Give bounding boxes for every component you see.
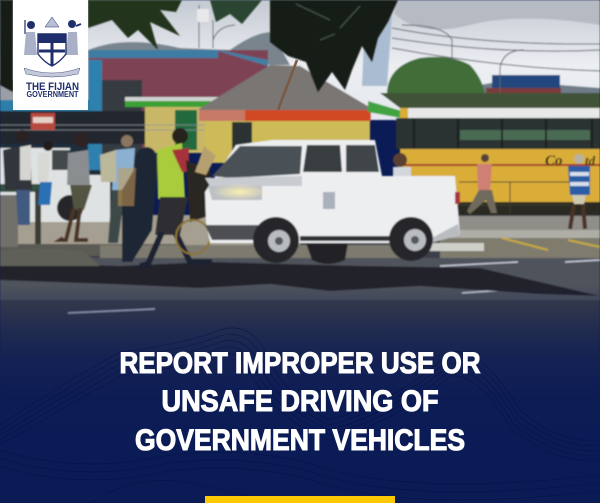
logo panel: The Fijian Government: GOVERNMENT [26, 90, 79, 99]
person behind truck [393, 153, 407, 167]
worker in hi-vis vest [140, 128, 216, 266]
left building [0, 100, 125, 215]
hut with grey roof [205, 118, 370, 163]
background white truck [0, 148, 110, 222]
street lights and wires [199, 5, 600, 95]
dark storefront [0, 111, 145, 144]
fence [459, 182, 570, 213]
pedestrian pink shirt [467, 154, 497, 214]
photo: street scene with government vehicle: td [585, 153, 596, 168]
tree shadow on road [0, 262, 600, 296]
green awning shop [145, 105, 215, 153]
logo panel: The Fijian Government [13, 0, 88, 110]
yellow bus [400, 108, 600, 208]
heading: GOVERNMENT VEHICLES [135, 424, 465, 457]
power pole [278, 60, 297, 110]
heading [120, 347, 481, 457]
red sign [31, 113, 55, 130]
pedestrians group left [3, 130, 135, 243]
road markings [68, 260, 600, 313]
pedestrian striped shirt [568, 154, 590, 229]
icon: Fijian coat of arms [24, 17, 81, 77]
green canopy [368, 101, 412, 120]
tree behind bus [387, 57, 485, 94]
sky [0, 0, 600, 120]
bus shelter roof [380, 93, 600, 108]
shipping containers [492, 75, 560, 89]
truck door logo [323, 192, 335, 209]
logo wordmark: THE FIJIAN [26, 81, 79, 93]
overhanging tree foliage [0, 0, 398, 92]
mountains [88, 32, 290, 65]
yellow bar [205, 496, 395, 503]
blue gradient overlay [0, 285, 600, 503]
stones on kerb [0, 249, 100, 266]
truck wheels [253, 217, 299, 263]
heading: UNSAFE DRIVING OF [162, 385, 438, 418]
billboard [362, 16, 392, 86]
heading: REPORT IMPROPER USE OR [120, 347, 481, 380]
white pickup truck [205, 140, 460, 264]
woman with dark hair [122, 147, 158, 262]
road and kerbs [0, 215, 600, 503]
bus text: Co [545, 153, 563, 169]
stall [0, 184, 44, 192]
contour line wave pattern [0, 328, 600, 503]
